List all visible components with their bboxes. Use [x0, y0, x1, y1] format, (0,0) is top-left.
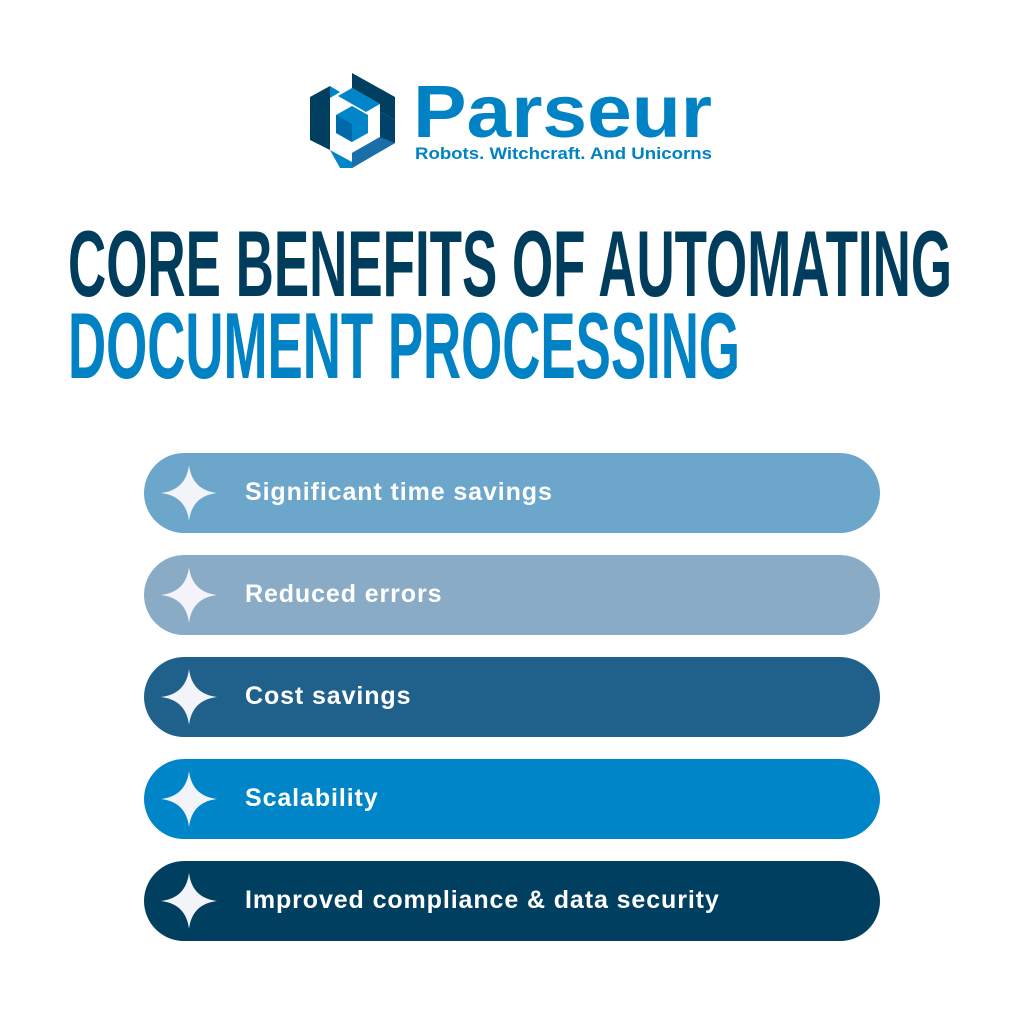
benefit: reduced errors	[144, 555, 880, 635]
icon: star	[161, 465, 217, 521]
brand name: Parseur	[413, 70, 712, 153]
icon: star	[161, 771, 217, 827]
benefit: cost savings	[144, 657, 880, 737]
benefit: compliance: Improved compliance & data security	[245, 886, 720, 914]
tagline: Robots. Witchcraft. And Unicorns	[415, 144, 712, 163]
logo	[310, 70, 712, 168]
benefit: cost savings: Cost savings	[245, 682, 411, 710]
benefit: time savings	[144, 453, 880, 533]
title	[68, 211, 952, 398]
benefit: scalability: Scalability	[245, 784, 379, 812]
icon: star	[161, 669, 217, 725]
benefit: scalability	[144, 759, 880, 839]
icon: star	[162, 568, 216, 622]
benefit: time savings: Significant time savings	[245, 478, 553, 506]
icon: star	[161, 873, 217, 929]
benefit: compliance	[144, 861, 880, 941]
benefit: reduced errors: Reduced errors	[245, 580, 442, 608]
icon: hexagon logo	[310, 73, 395, 168]
